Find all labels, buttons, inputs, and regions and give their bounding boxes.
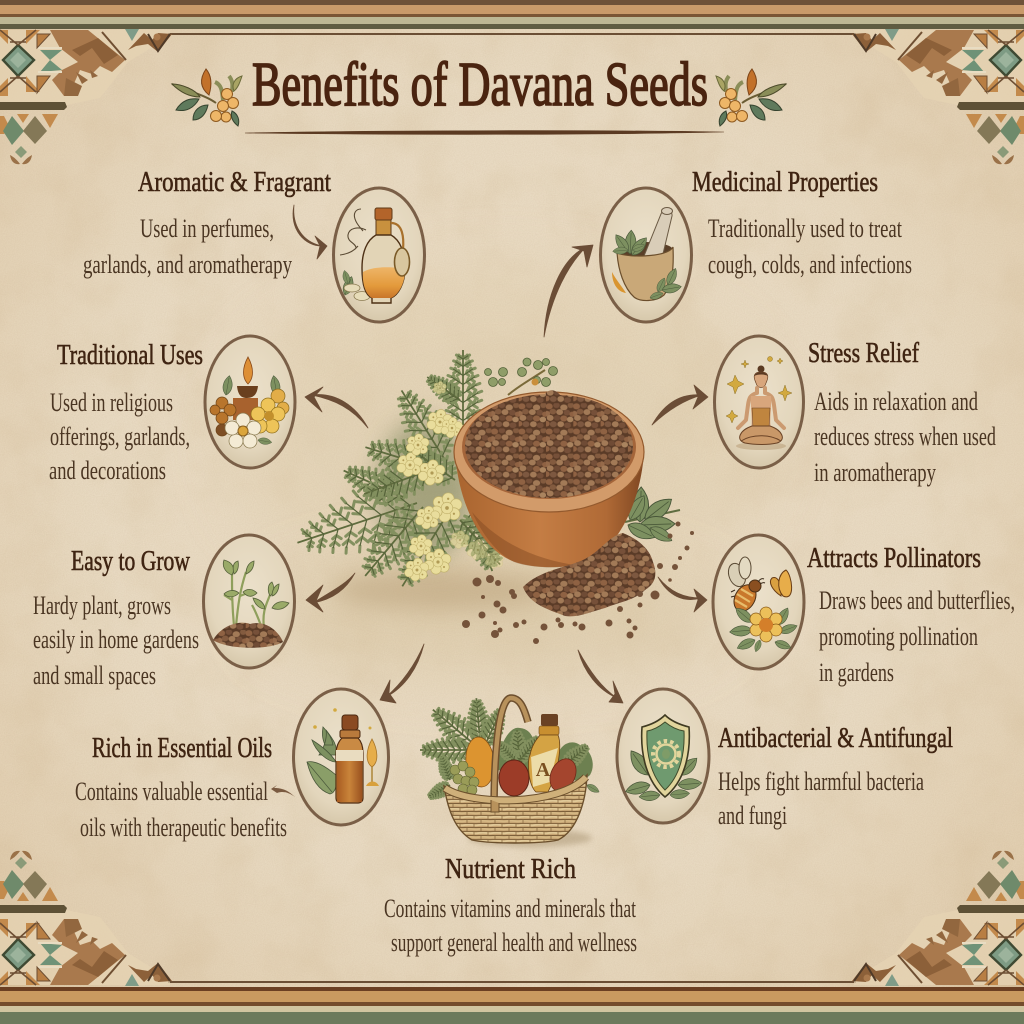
text block: Contains vitamins and minerals that	[384, 894, 637, 923]
icon: meditating figure medallion	[714, 336, 804, 468]
text block: support general health and wellness	[391, 928, 637, 957]
text block	[819, 586, 1015, 687]
top border bands	[0, 0, 1024, 35]
text block: in gardens	[819, 658, 894, 687]
text block: cough, colds, and infections	[708, 250, 912, 279]
text block: and decorations	[49, 456, 166, 485]
text block: and small spaces	[33, 661, 156, 690]
arrow: to Traditional Uses	[305, 387, 368, 428]
text block	[49, 388, 190, 485]
icon: shield medallion	[617, 689, 709, 823]
icon: seedlings medallion	[204, 535, 294, 668]
panel: Aromatic & Fragrant	[83, 166, 424, 322]
icon: mortar and pestle medallion	[600, 188, 692, 322]
arrow: to Medicinal Properties	[544, 245, 593, 337]
text block	[708, 214, 912, 279]
text block	[814, 387, 996, 487]
text block: offerings, garlands,	[50, 422, 190, 451]
text block	[33, 591, 199, 690]
panel: Nutrient Rich	[384, 697, 637, 957]
text block	[83, 214, 292, 279]
text block: Used in perfumes,	[140, 214, 274, 243]
arrow: to Attracts Pollinators	[658, 577, 707, 612]
heading: Medicinal Properties	[692, 166, 878, 198]
corner ornament: bottom left	[0, 851, 172, 986]
arrow: to Aromatic & Fragrant	[293, 205, 327, 259]
icon: bee, butterfly and flower medallion	[713, 535, 804, 669]
arrow: to Rich in Essential Oils	[380, 644, 424, 703]
heading: Stress Relief	[808, 337, 919, 369]
small curl arrow	[271, 785, 295, 797]
heading: Rich in Essential Oils	[92, 732, 272, 764]
panel: Attracts Pollinators	[713, 535, 1015, 687]
icon: basket of produce	[420, 697, 601, 847]
icon: oil lamp and flowers medallion	[205, 336, 295, 468]
heading: Traditional Uses	[57, 339, 203, 371]
text block: and fungi	[718, 801, 787, 830]
panel: Traditional Uses	[49, 336, 295, 485]
arrow: to Stress Relief	[652, 385, 708, 425]
corner ornament: top left	[0, 29, 172, 164]
panel: Medicinal Properties	[600, 166, 912, 322]
title: Benefits of Davana Seeds	[252, 51, 708, 119]
upper sprig	[484, 358, 558, 395]
seeds in bowl	[465, 390, 633, 498]
panel: Antibacterial & Antifungal	[617, 689, 953, 830]
heading: Antibacterial & Antifungal	[718, 722, 953, 754]
text block: Hardy plant, grows	[33, 591, 171, 620]
icon: right title sprig	[716, 69, 786, 126]
ground shadow	[330, 570, 550, 610]
icon: perfume bottle medallion	[334, 188, 424, 322]
icon: left title sprig	[172, 69, 242, 126]
text block: easily in home gardens	[33, 625, 199, 654]
corner ornament: top right	[852, 29, 1024, 164]
arrow: to Easy to Grow	[306, 573, 355, 612]
terracotta bowl	[454, 392, 644, 567]
fern fronds	[287, 350, 511, 598]
text block	[384, 894, 637, 957]
green foliage mass	[377, 420, 473, 560]
text block: garlands, and aromatherapy	[83, 250, 292, 279]
corner ornament: bottom right	[852, 851, 1024, 986]
heading: Easy to Grow	[71, 545, 190, 577]
text block: oils with therapeutic benefits	[80, 813, 287, 842]
text block: Used in religious	[50, 388, 173, 417]
seed pile	[523, 533, 655, 616]
text block: Helps fight harmful bacteria	[718, 767, 924, 796]
text block: in aromatherapy	[814, 458, 936, 487]
icon: essential oil bottle medallion	[294, 689, 388, 825]
loose seeds	[462, 522, 694, 644]
title underline	[245, 131, 724, 134]
right sprig leaves	[624, 487, 680, 546]
pale yellow flower clusters	[397, 381, 504, 581]
bottom border bands	[0, 981, 1024, 1024]
icon: basket of produce: A	[536, 759, 551, 781]
panel: Rich in Essential Oils	[75, 689, 388, 842]
arrow: to Antibacterial & Antifungal	[578, 650, 623, 703]
text block	[75, 777, 287, 842]
heading: Nutrient Rich	[445, 853, 576, 885]
panel: Easy to Grow	[33, 535, 294, 690]
heading: Aromatic & Fragrant	[138, 166, 331, 198]
text block	[718, 767, 924, 830]
text block: Traditionally used to treat	[708, 214, 903, 243]
central illustration: plant and bowl of seeds	[287, 350, 694, 644]
panel: Stress Relief	[714, 336, 996, 487]
text block: Contains valuable essential	[75, 777, 268, 806]
